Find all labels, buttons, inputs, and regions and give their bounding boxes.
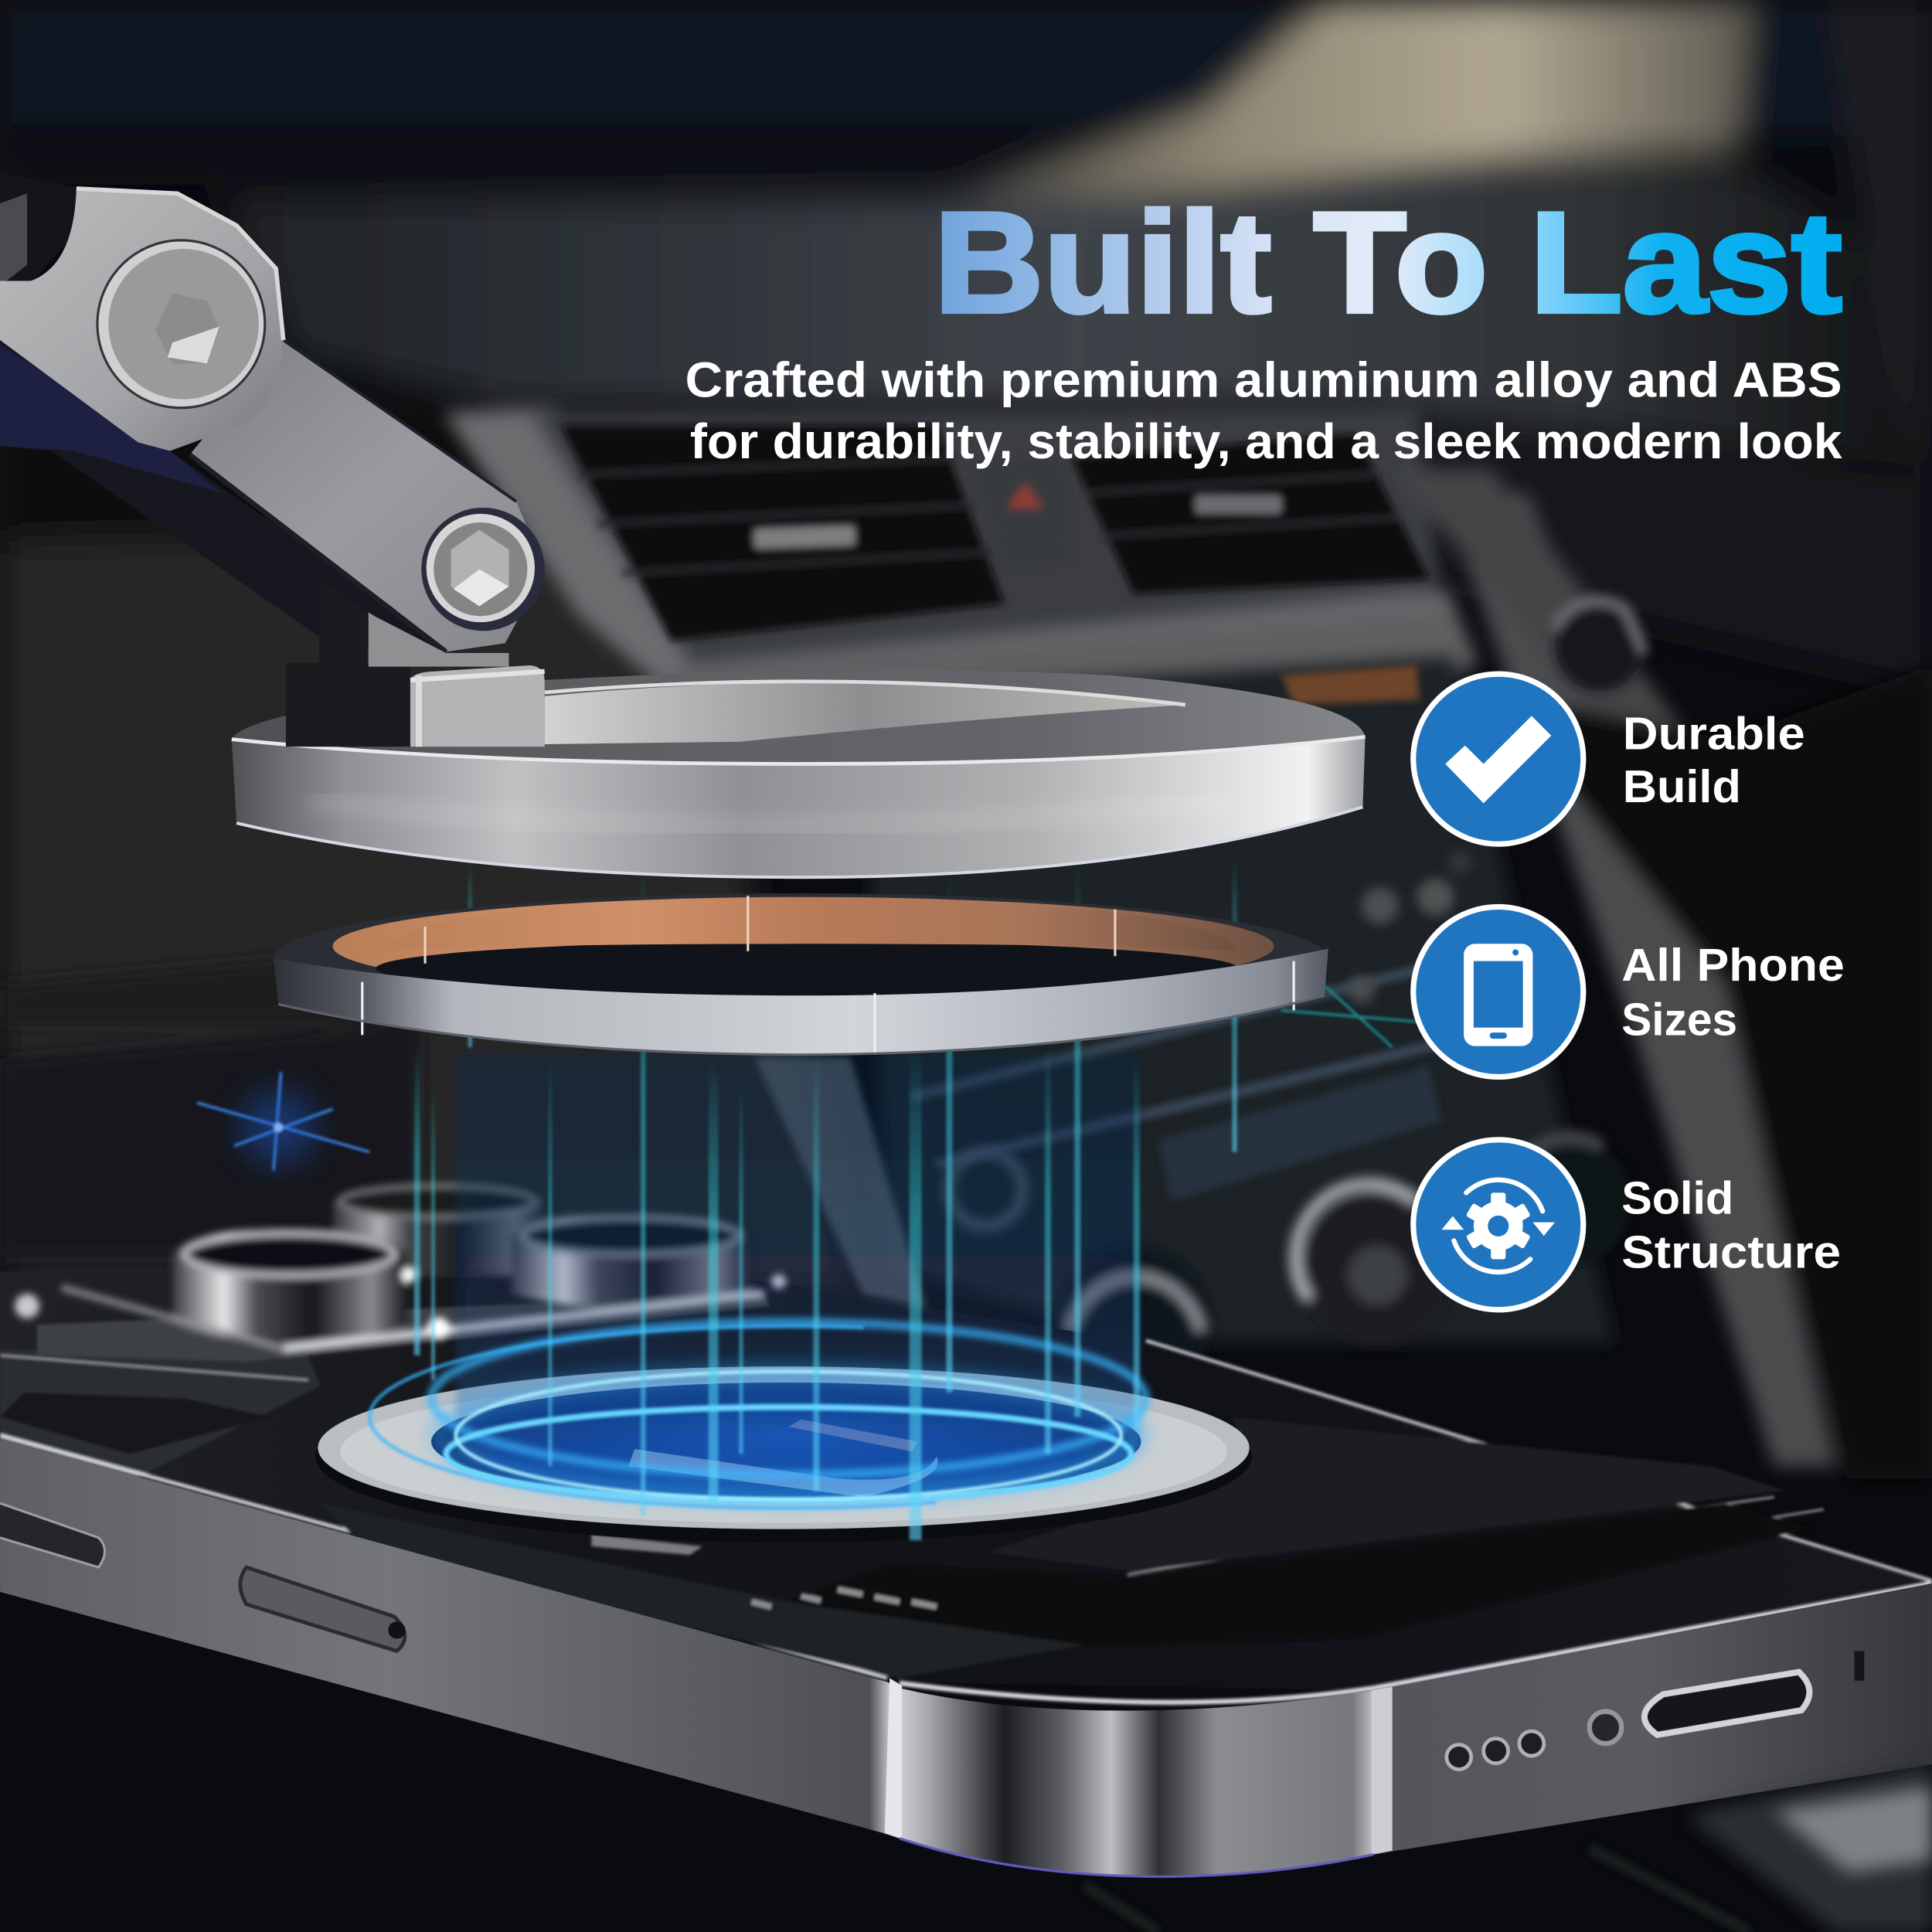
magnetic energy hologram [197,856,1429,1540]
leather seam shade [0,949,419,1022]
subtitle: for durability, stability, and a sleek modern look [690,413,1842,469]
copper inner wall [382,898,1238,951]
label [1623,708,1805,812]
air vents [560,425,1004,641]
label: Solid [1621,1172,1733,1223]
feature: all phone sizes [1413,906,1845,1077]
subtitle: Crafted with premium aluminum alloy and ABS [685,352,1842,407]
phone back surface [0,1271,1932,1691]
title: Built To Last [934,183,1842,342]
magnetic ring on phone [315,1366,1252,1543]
label: Structure [1621,1227,1841,1278]
star flare [197,986,1429,1171]
articulated arm [0,172,545,747]
feature: solid structure [1413,1140,1841,1310]
small pivot screw [421,508,545,631]
large pivot screw [97,240,265,408]
phone side frame [0,1439,1932,1876]
icon: check badge [1413,674,1583,844]
phone socket end [0,172,77,284]
icon: smartphone badge [1413,906,1583,1077]
upper arm [0,189,284,451]
label: All Phone [1621,940,1845,991]
ring outer band [274,949,1328,1055]
ring side band [232,736,1366,877]
copper coil ring [274,893,1328,1055]
speaker holes and charging port [1447,1745,1471,1770]
dark underside [0,340,446,653]
subtitle [685,352,1842,469]
ring top face [274,893,1328,1024]
camera module [15,1185,786,1349]
ring top face [232,670,1366,764]
bottom shelf [1688,1762,1932,1932]
label: Build [1623,761,1741,812]
label [1621,1172,1841,1278]
see-through silver bar [754,1057,927,1308]
aluminum mount ring [232,670,1366,877]
label [1621,940,1845,1045]
lower arm [190,340,545,651]
console buttons and knobs [949,1152,1022,1226]
label: Durable [1623,708,1805,759]
light beams [414,856,1237,1540]
volume and sim slots [0,1503,105,1567]
icon: gear badge [1413,1140,1583,1310]
phone below the mount [0,1185,1932,1932]
label: Sizes [1621,994,1737,1045]
mount bracket [286,580,410,747]
ring inner opening [545,682,1185,744]
feature: durable build [1413,674,1805,844]
